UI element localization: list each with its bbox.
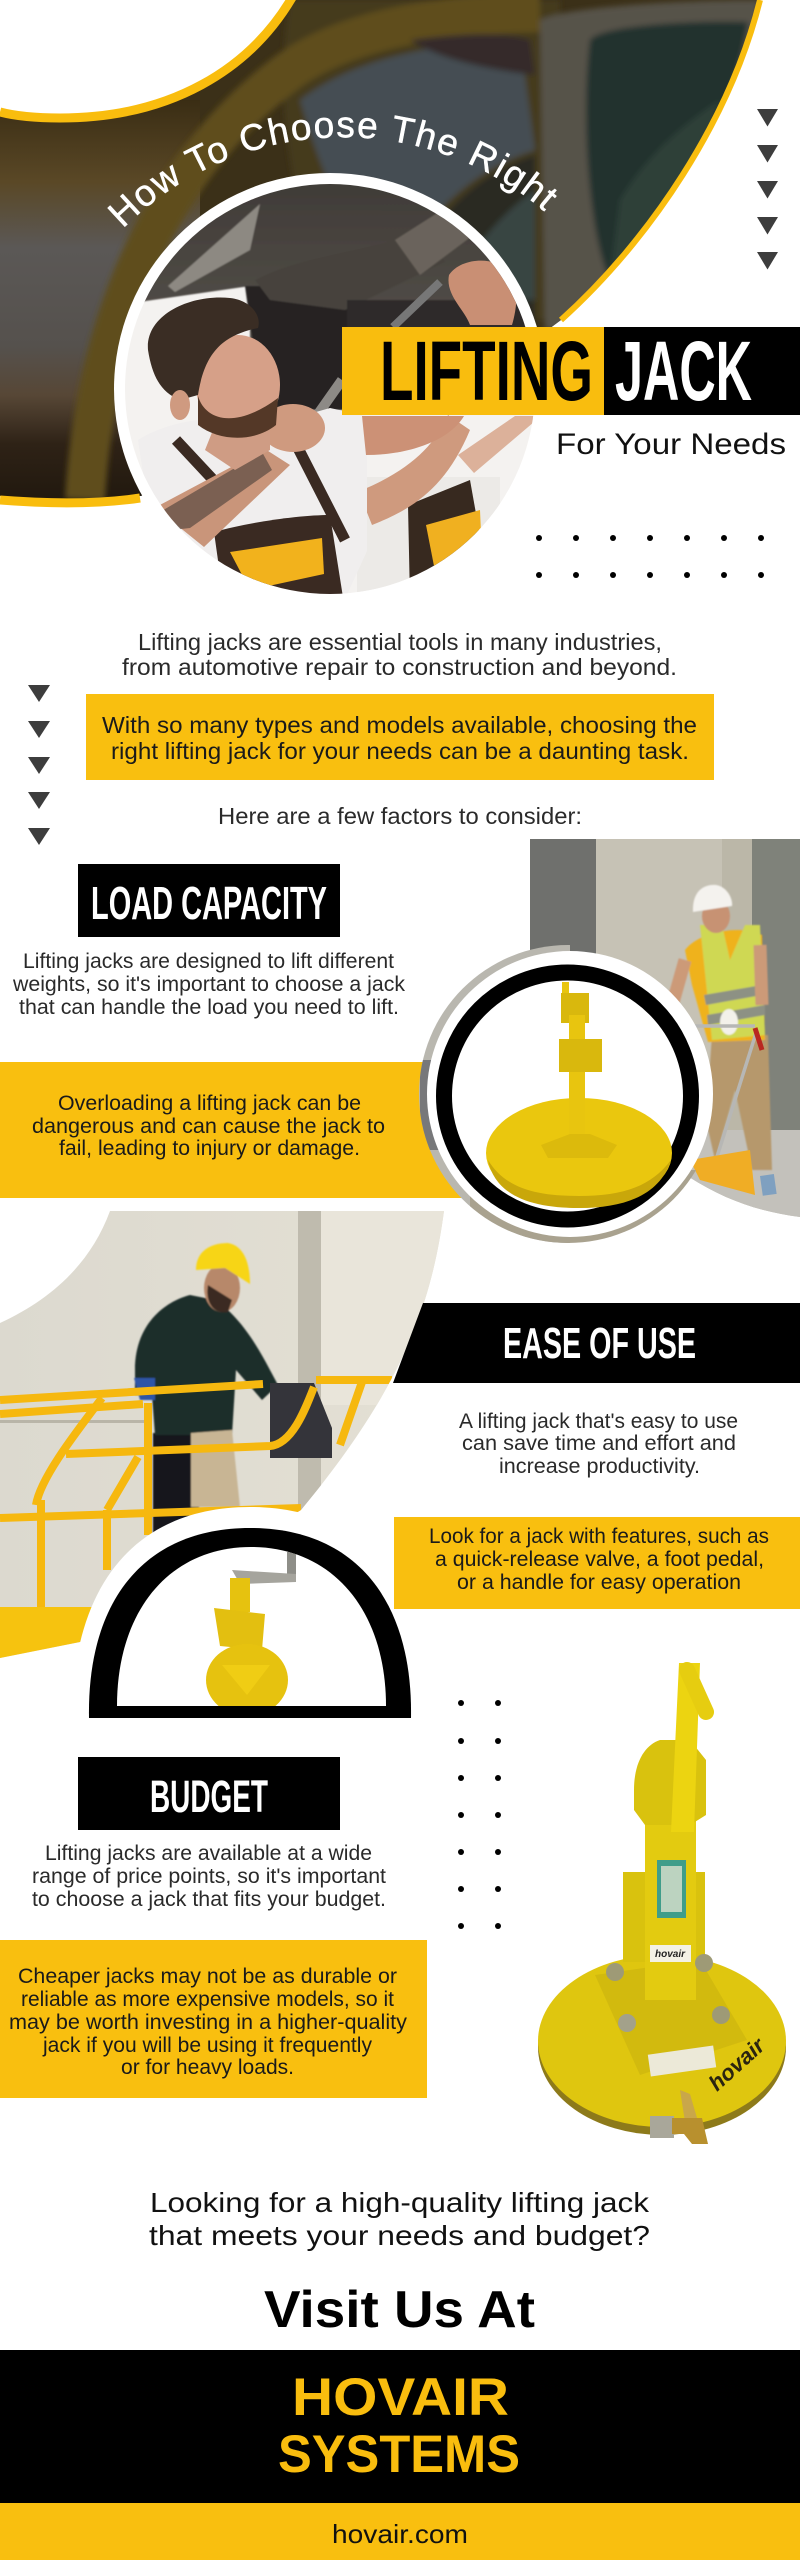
yellow band: overloading bbox=[0, 1062, 470, 1198]
footer band: website bbox=[0, 2503, 800, 2560]
callout: cheaper jacks: or for heavy loads. bbox=[121, 2056, 294, 2079]
callout: ease features: or a handle for easy operation bbox=[457, 1571, 741, 1594]
callout: cheaper jacks: reliable as more expensive models, so it bbox=[21, 1988, 394, 2011]
callout: types and models bbox=[86, 694, 714, 780]
title banner: LIFTING JACK: LIFTING bbox=[380, 324, 593, 418]
text: ease of use: increase productivity. bbox=[499, 1455, 700, 1478]
footer band: website: hovair.com bbox=[332, 2519, 468, 2549]
text: budget bbox=[32, 1842, 386, 1911]
text: overloading: fail, leading to injury or damage. bbox=[59, 1137, 360, 1160]
hand and upper arm bbox=[261, 404, 464, 455]
overalls bbox=[214, 515, 342, 594]
hero photo: car door bbox=[0, 0, 800, 510]
text: overloading bbox=[32, 1092, 385, 1160]
callout: ease features: Look for a jack with features, such as bbox=[429, 1525, 769, 1548]
head bbox=[148, 298, 280, 470]
second worker bbox=[357, 415, 541, 600]
photo: worker on lift platform bbox=[0, 1205, 450, 1665]
hero circle photo: mechanics bbox=[114, 173, 537, 594]
text: factors intro: Here are a few factors to consider: bbox=[218, 803, 582, 829]
callout: types and models: With so many types and models available, choosing the bbox=[102, 712, 697, 738]
product ring: jack in circle bbox=[427, 951, 713, 1237]
text: overloading: Overloading a lifting jack can be bbox=[58, 1092, 361, 1115]
heading: budget: BUDGET bbox=[150, 1771, 268, 1822]
intro text: Lifting jacks are essential tools in many industries, bbox=[138, 629, 662, 655]
text: budget: Lifting jacks are available at a wide bbox=[45, 1842, 372, 1865]
heading: load capacity: LOAD CAPACITY bbox=[91, 877, 327, 929]
fist bbox=[448, 261, 517, 325]
footer band: brand: HOVAIR bbox=[292, 2368, 509, 2427]
intro text: from automotive repair to construction and beyond. bbox=[122, 654, 677, 680]
visit us heading: Visit Us At bbox=[264, 2281, 535, 2339]
dot grid lower bbox=[458, 1700, 501, 1929]
text: load capacity: weights, so it's important to choose a jack bbox=[12, 973, 406, 996]
footer band: brand: SYSTEMS bbox=[278, 2425, 520, 2484]
overall pocket bbox=[230, 538, 324, 590]
text: load capacity: Lifting jacks are designed to lift different bbox=[23, 950, 394, 973]
large jack product bbox=[538, 1663, 786, 2144]
callout: types and models: right lifting jack for your needs can be a daunting task. bbox=[111, 738, 689, 764]
callout: ease features bbox=[394, 1517, 800, 1609]
text: budget: to choose a jack that fits your budget. bbox=[32, 1888, 386, 1911]
heading: budget bbox=[78, 1757, 340, 1830]
text: load capacity bbox=[12, 950, 406, 1019]
photo: worker with jack bbox=[410, 839, 800, 1250]
icon: triangle column right bbox=[757, 109, 778, 270]
curved heading: How To Choose The Right bbox=[107, 115, 557, 227]
subtitle: For Your Needs bbox=[556, 428, 786, 461]
large jack product: hovair bbox=[655, 1949, 686, 1960]
dot grid hero bbox=[536, 535, 764, 578]
text: load capacity: that can handle the load you need to lift. bbox=[19, 996, 399, 1019]
icon: triangle column left bbox=[28, 685, 50, 845]
text: budget: range of price points, so it's important bbox=[32, 1865, 386, 1888]
closing question bbox=[149, 2187, 650, 2251]
arm with tattoo bbox=[158, 449, 290, 547]
callout: cheaper jacks: may be worth investing in a higher-quality bbox=[9, 2011, 408, 2034]
text: ease of use: A lifting jack that's easy to use bbox=[459, 1410, 738, 1433]
hero yellow border arcs bbox=[0, 0, 760, 503]
text: ease of use: can save time and effort and bbox=[462, 1432, 736, 1455]
intro text bbox=[122, 629, 677, 680]
callout: cheaper jacks: Cheaper jacks may not be as durable or bbox=[18, 1965, 397, 1988]
callout: cheaper jacks: jack if you will be using it frequently bbox=[42, 2034, 372, 2057]
man shirt bbox=[316, 408, 367, 512]
text: ease of use bbox=[459, 1410, 738, 1478]
text: overloading: dangerous and can cause the jack to bbox=[32, 1115, 385, 1138]
arch: jack in semicircle bbox=[80, 1507, 412, 1718]
heading: ease of use: EASE OF USE bbox=[503, 1319, 696, 1368]
footer band: brand bbox=[0, 2350, 800, 2503]
large jack product: hovair bbox=[704, 2032, 770, 2096]
heading: ease of use bbox=[393, 1303, 800, 1383]
closing question: that meets your needs and budget? bbox=[149, 2220, 650, 2251]
callout: cheaper jacks bbox=[0, 1940, 427, 2098]
overall straps bbox=[176, 440, 345, 540]
callout: ease features: a quick-release valve, a foot pedal, bbox=[435, 1548, 764, 1571]
heading: load capacity bbox=[78, 864, 340, 937]
closing question: Looking for a high-quality lifting jack bbox=[150, 2187, 650, 2218]
